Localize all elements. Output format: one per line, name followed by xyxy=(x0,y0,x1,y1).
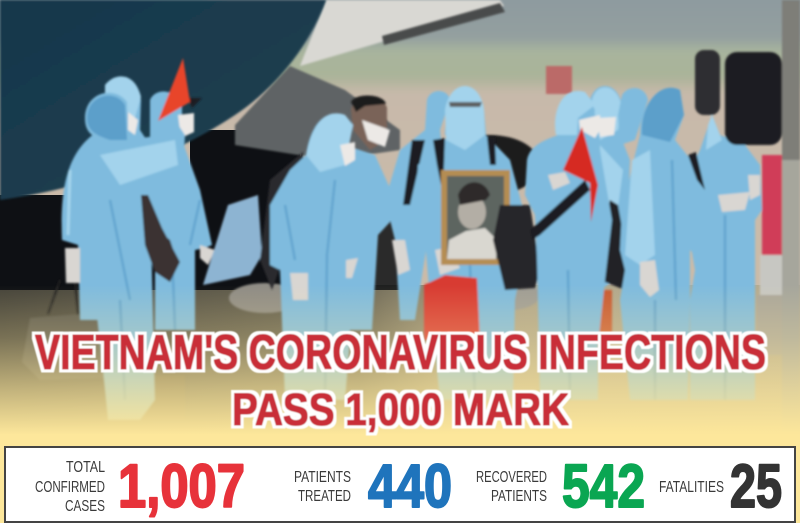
yellow fade overlay at the base of the photo xyxy=(0,285,800,435)
person: holding flag xyxy=(525,91,612,400)
stat: patients treated xyxy=(294,452,452,520)
red carrier bag xyxy=(424,275,480,340)
person: man without hood xyxy=(345,95,393,330)
person: holding portrait xyxy=(415,86,525,400)
plane underside wing xyxy=(300,0,504,66)
black backpack left xyxy=(260,152,305,290)
person: far right xyxy=(685,115,762,400)
shoulder bag xyxy=(141,195,180,282)
framed portrait xyxy=(441,170,510,265)
wing stripe xyxy=(382,3,505,45)
person: front left raising flag xyxy=(85,93,185,420)
person: behind portrait left xyxy=(385,91,450,320)
person: back to viewer xyxy=(620,88,710,400)
stat: total confirmed cases: CASES xyxy=(65,498,105,515)
red flag right xyxy=(563,127,598,222)
dark luggage at feet xyxy=(143,375,185,420)
black backpack right xyxy=(598,200,628,290)
stats panel xyxy=(5,447,795,522)
stat: total confirmed cases: CONFIRMED xyxy=(35,479,105,496)
stat: recovered patients: 542 xyxy=(562,452,645,520)
title: PASS 1,000 MARK xyxy=(232,384,569,435)
person: behind right, far xyxy=(618,88,648,145)
blue plastic bag xyxy=(203,195,262,285)
stat: fatalities: FATALITIES xyxy=(659,479,724,496)
stat: patients treated: TREATED xyxy=(298,488,351,505)
orange-red lower garment xyxy=(590,290,612,340)
red flag left xyxy=(158,58,190,121)
stat: recovered patients: PATIENTS xyxy=(491,488,547,505)
stat: total confirmed cases: 1,007 xyxy=(118,452,245,520)
black backpack centre xyxy=(493,205,540,290)
stat: fatalities xyxy=(659,452,782,520)
stat: patients treated: 440 xyxy=(368,452,452,520)
tyre wheel xyxy=(440,135,540,195)
travel bag on ground xyxy=(22,312,110,380)
stat: fatalities: 25 xyxy=(730,452,782,520)
title xyxy=(35,326,766,435)
truck xyxy=(695,0,800,450)
person: behind right, mask xyxy=(590,86,630,290)
stat: total confirmed cases xyxy=(35,452,245,520)
stat: recovered patients: RECOVERED xyxy=(476,469,547,486)
person: centre-left suit xyxy=(270,113,362,400)
person: back left xyxy=(62,76,150,320)
person: with cap xyxy=(145,92,215,330)
plane fuselage xyxy=(0,0,326,200)
stat: total confirmed cases: TOTAL xyxy=(66,459,105,476)
photo: medical group in blue protective suits xyxy=(62,0,800,450)
landing gear xyxy=(235,66,400,160)
stat: patients treated: PATIENTS xyxy=(294,469,351,486)
stat: recovered patients xyxy=(476,452,645,520)
